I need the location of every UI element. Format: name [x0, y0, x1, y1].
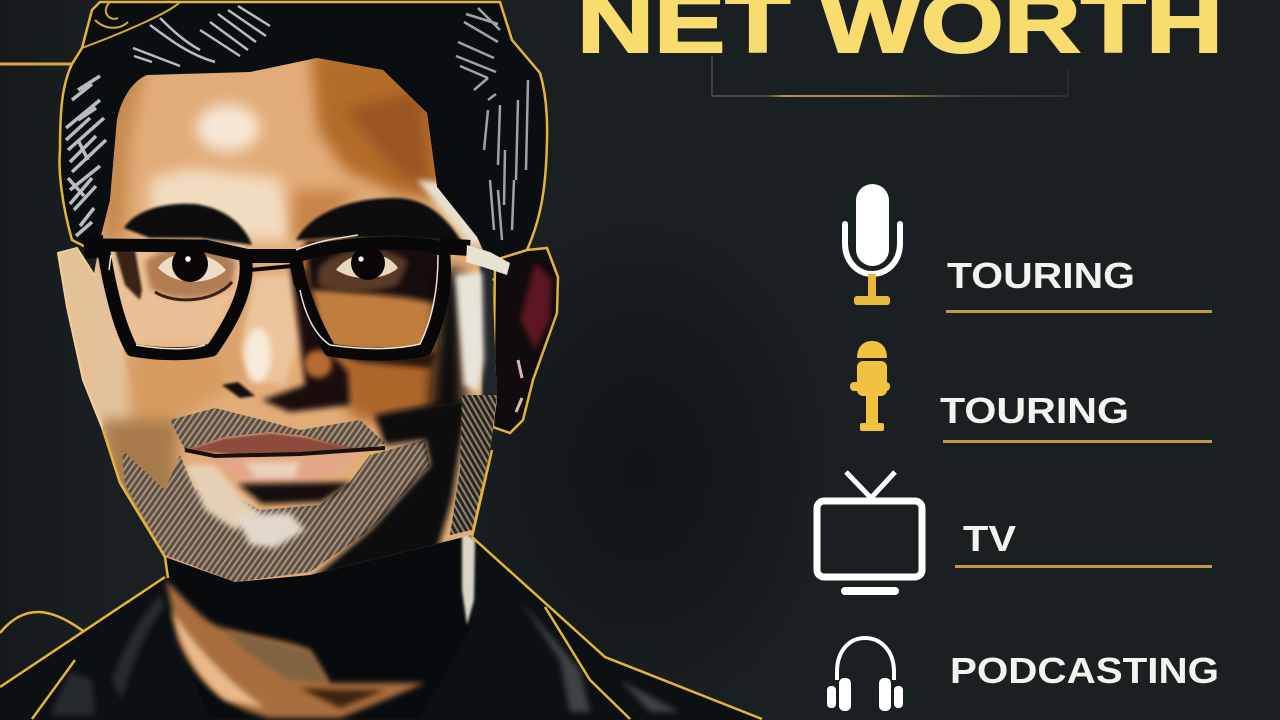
icon: studio microphone: [845, 184, 900, 305]
icon: television: [817, 472, 922, 595]
neck stubble: [225, 630, 328, 683]
right cheek dark side: [430, 270, 465, 420]
right lens skin: [300, 245, 440, 350]
row: yellow microphone touring: [850, 341, 1212, 443]
row: television: [817, 472, 1212, 595]
chin highlight: [235, 513, 305, 548]
glasses temple highlight: [466, 245, 510, 275]
jacket gold outline: [0, 537, 762, 719]
underline: [955, 565, 1212, 568]
grey hair strands, left: [66, 76, 106, 236]
nose ridge: [240, 275, 298, 385]
forehead orange right side: [310, 50, 445, 200]
label: TV: [963, 518, 1016, 559]
glasses rim highlight, right lens: [296, 235, 438, 349]
mouth line: [185, 448, 385, 456]
nose highlight: [245, 328, 271, 382]
lower lip: [205, 452, 365, 482]
background left tone: [0, 0, 110, 720]
neck skin: [166, 580, 425, 718]
left eyebrow: [124, 204, 252, 245]
right lens frame: [296, 243, 444, 354]
gold accent line, upper left: [0, 62, 72, 66]
temple left: [84, 246, 104, 248]
left jaw skin: [100, 420, 190, 560]
title frame: [712, 56, 1068, 96]
pale temple strip: [417, 180, 490, 245]
jacket left sheen: [50, 595, 165, 715]
grey sideburn: [480, 265, 500, 400]
forehead highlight: [196, 104, 260, 152]
face: [85, 50, 505, 590]
row: microphone touring: [845, 184, 1212, 313]
forehead left edge: [100, 70, 145, 240]
neck light band: [172, 610, 265, 708]
portrait illustration: [0, 2, 765, 720]
right eyebrow: [296, 198, 462, 242]
right eye: [336, 246, 398, 280]
upper lip: [185, 433, 362, 456]
white temple hair: [455, 272, 484, 392]
grey hair strands, top: [133, 6, 270, 66]
underline: [946, 310, 1212, 313]
grey hair strands, right: [456, 8, 528, 240]
under-lens right shadow: [330, 352, 440, 368]
left eye: [158, 246, 226, 282]
left cheek: [130, 350, 240, 435]
right lens dark upper: [305, 240, 445, 305]
bridge: [245, 249, 298, 263]
face skin base: [85, 50, 505, 590]
neck shadow: [165, 520, 475, 718]
right grey stubble: [450, 395, 497, 535]
hair: [60, 2, 547, 280]
left under-eye line: [155, 282, 232, 300]
neck pale highlight: [462, 530, 475, 625]
under-lip shadow: [238, 482, 352, 504]
left ear: [58, 248, 110, 430]
ear highlights: [516, 360, 522, 412]
label: TOURING: [940, 390, 1129, 431]
forehead brown streak: [345, 90, 430, 190]
gold accent curve, lower left: [0, 612, 95, 640]
left lens frame: [103, 245, 246, 354]
right eye socket: [318, 249, 408, 292]
label: PODCASTING: [950, 650, 1219, 691]
pale lip-side skin: [185, 465, 262, 530]
jaw gold outline: [103, 430, 492, 578]
left lens warm shadow: [115, 250, 142, 300]
left nostril: [222, 382, 255, 398]
ear inner red: [520, 262, 552, 350]
icon: yellow microphone: [850, 341, 890, 431]
left eye socket: [145, 246, 236, 298]
forehead pale mid: [150, 168, 295, 240]
icon: headphones: [827, 638, 903, 711]
black jaw right: [310, 400, 468, 580]
row: podcasting: [827, 638, 1219, 711]
left lens skin: [108, 245, 245, 350]
label: TOURING: [947, 255, 1135, 296]
hair knot outline: [82, 2, 180, 48]
glasses rim highlight, left lens: [109, 255, 205, 349]
brow orange patch: [290, 190, 360, 240]
nose left plane: [216, 278, 251, 370]
right ear: [493, 248, 558, 433]
underline: [943, 440, 1212, 443]
neck shadow crease: [300, 688, 385, 708]
nose wing: [304, 350, 332, 378]
lower lip highlight: [245, 462, 300, 478]
glasses: [84, 243, 470, 354]
bridge underside: [250, 266, 296, 285]
background shadow behind the portrait: [450, 220, 830, 720]
jacket: [0, 537, 765, 720]
stubble: [122, 440, 430, 582]
nose right shadow: [262, 262, 350, 412]
left cheek side: [93, 260, 135, 442]
jacket right sheen: [520, 600, 680, 712]
upper-lip stubble: [170, 408, 385, 452]
right cheek: [330, 352, 450, 430]
temple right: [440, 246, 470, 248]
